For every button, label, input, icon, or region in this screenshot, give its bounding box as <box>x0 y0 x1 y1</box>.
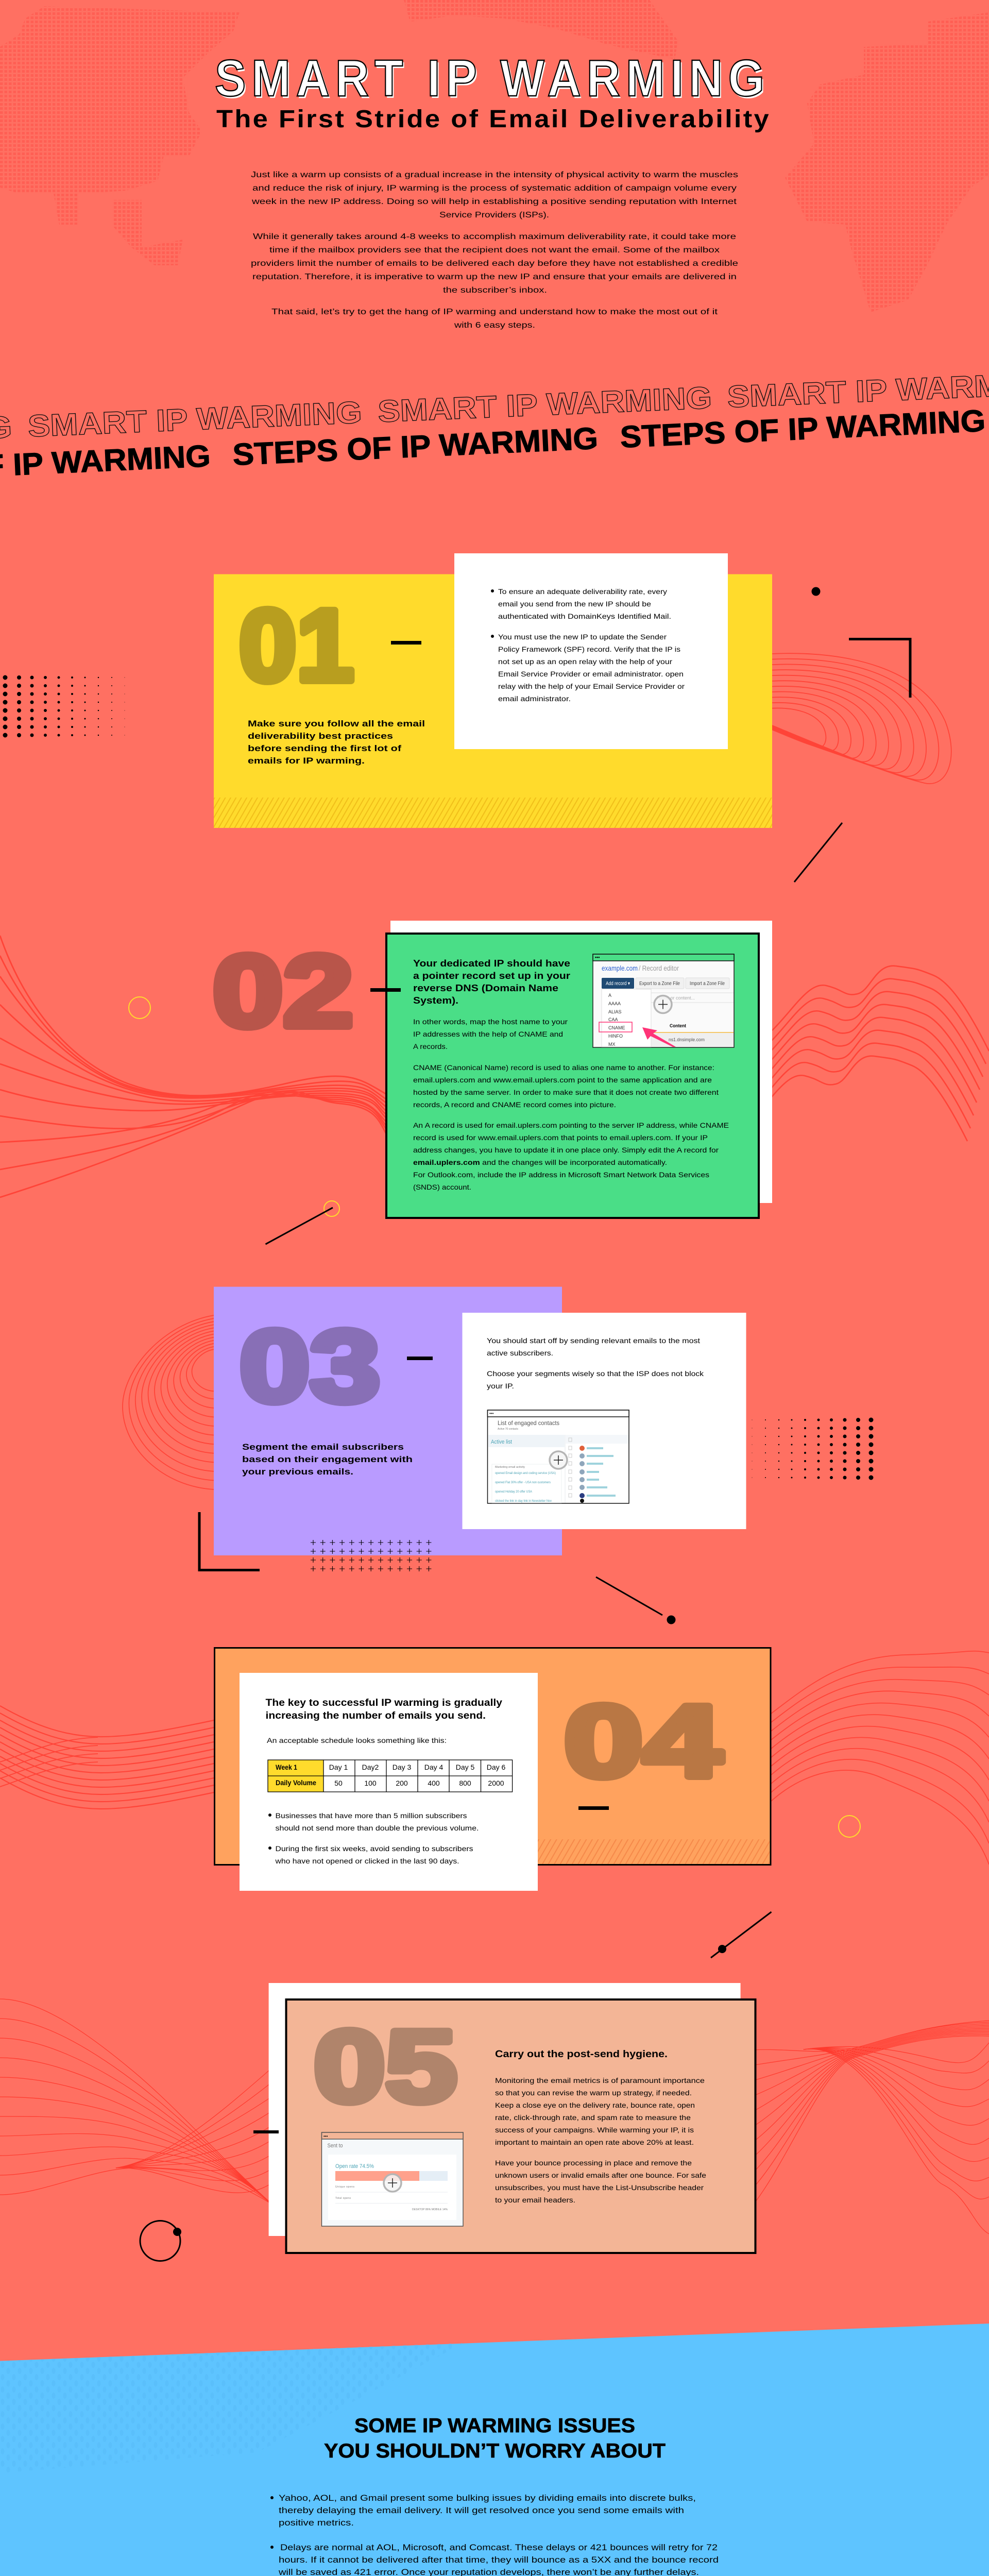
step 2 heading: reverse DNS (Domain Name <box>413 983 558 993</box>
step 4 schedule table: Day 6 <box>487 1763 505 1771</box>
step 2 screenshot: record editor: / Record editor <box>639 964 679 972</box>
step 5 paragraphs: important to maintain an open rate above 20% at least. <box>495 2138 694 2146</box>
step 4 number: 04 <box>564 1684 722 1798</box>
step 5 white backing <box>269 1983 741 2236</box>
step 5 paragraphs: to your email headers. <box>495 2196 575 2204</box>
step 2 screenshot: record editor: AAAA <box>608 1001 621 1006</box>
step 4 hatch strip <box>538 1839 770 1864</box>
step 5 heading: Carry out the post-send hygiene. <box>495 2049 668 2060</box>
red waves: step 4 left <box>0 1706 216 1809</box>
issues bullets: Yahoo, AOL, and Gmail present some bulking issues by dividing emails into discrete bulks, <box>279 2493 696 2503</box>
step 1 heading: Make sure you follow all the email <box>248 719 425 728</box>
intro text block: the subscriber’s inbox. <box>443 286 547 295</box>
red waves: step 5 right <box>752 2021 989 2234</box>
step 5 paragraphs: Have your bounce processing in place and remove the <box>495 2159 692 2167</box>
step 2 screenshot: record editor: Import a Zone File <box>690 981 725 987</box>
step 4 bullets: During the first six weeks, avoid sending to subscribers <box>275 1844 473 1853</box>
step 4 heading: The key to successful IP warming is gradually <box>266 1698 502 1708</box>
step 3 purple card <box>214 1287 562 1555</box>
step 5 number: 05 <box>314 2009 457 2123</box>
step 2 dash <box>370 988 401 992</box>
step 2 paragraphs <box>413 1018 729 1191</box>
step 3 heading: your previous emails. <box>242 1467 353 1477</box>
issues bullets: Delays are normal at AOL, Microsoft, and Comcast. These delays or 421 bounces will retry for 72 <box>280 2543 718 2552</box>
step 5 paragraphs: unsubscribes, you must have the List-Unsubscribe header <box>495 2183 704 2192</box>
step 2 screenshot: record editor: CNAME <box>608 1025 625 1030</box>
step 5 screenshot: open rate: Open rate 74.5% <box>335 2163 374 2170</box>
red waves: step 2 left <box>0 936 387 1197</box>
step 5 paragraphs: unknown users or invalid emails after one bounce. For safe <box>495 2171 706 2179</box>
step 2 paragraphs: records, A record and CNAME record comes into picture. <box>413 1100 616 1109</box>
step 5 paragraphs <box>495 2076 706 2204</box>
slanted band: SMART IP WARMING outline: SMART IP WARMING <box>377 380 712 429</box>
step 3 screenshot: engaged contacts: opened Email design and coding service (USA) <box>495 1472 556 1475</box>
panel: step 2 <box>213 921 772 1218</box>
step 4 schedule table: Day 3 <box>393 1763 411 1771</box>
step 2 paragraphs: An A record is used for email.uplers.com pointing to the server IP address, while CNAME <box>413 1121 729 1129</box>
step 1 dash <box>391 641 421 645</box>
step 3 text: You should start off by sending relevant emails to the most <box>487 1336 700 1345</box>
step 2 screenshot: record editor: HINFO <box>608 1033 623 1039</box>
slanted band: SMART IP WARMING outline <box>0 366 989 458</box>
panel: step 4 <box>214 1648 771 1891</box>
step 3 dash <box>407 1357 433 1360</box>
step 5 paragraphs: so that you can revise the warm up strategy, if needed. <box>495 2089 692 2097</box>
step 2 screenshot: record editor: CAA <box>608 1017 618 1022</box>
step 1 heading: emails for IP warming. <box>248 756 365 766</box>
blue dot texture <box>0 2343 989 2576</box>
step 4 schedule table: Day 5 <box>456 1763 474 1771</box>
step 1 hatch strip <box>214 798 772 828</box>
step 4 schedule table: Daily Volume <box>276 1778 316 1787</box>
step 4 schedule table <box>268 1760 513 1792</box>
step 2 screenshot: record editor: Content <box>670 1023 686 1028</box>
step 2 paragraphs: email.uplers.com and the changes will be incorporated automatically. <box>413 1158 667 1166</box>
step 3 screenshot: engaged contacts: opened Holiday 20 offer USA <box>495 1490 532 1494</box>
issues bullets <box>270 2493 719 2576</box>
red waves: step 5 left <box>0 1999 273 2205</box>
step 4 white panel <box>240 1673 538 1891</box>
step 4 dash <box>578 1806 609 1810</box>
step 2 screenshot: record editor: example.com <box>602 964 638 972</box>
step 4 schedule table: Week 1 <box>276 1763 297 1771</box>
step 5 screenshot: open rate: Unique opens <box>335 2185 354 2189</box>
step 3 white panel <box>463 1313 746 1529</box>
step 4 schedule table: Day2 <box>362 1763 379 1771</box>
step 2 screenshot: record editor: MX <box>608 1042 615 1047</box>
step 1 heading: before sending the first lot of <box>248 743 401 753</box>
step 1 heading <box>248 719 425 766</box>
blue background <box>0 2324 989 2576</box>
issues bullets: hours. If it cannot be delivered after that time, they will bounce as a 5XX and the bounce record <box>279 2555 719 2565</box>
step 1 bullet text: Email Service Provider or email administrator. open <box>498 670 684 678</box>
decor: corner bracket, line and dot below step 3 <box>199 1512 676 1624</box>
world map dotted background <box>0 0 989 312</box>
step 4 heading: increasing the number of emails you send. <box>266 1710 486 1721</box>
intro text block: week in the new IP address. Doing so will help in establishing a positive sending reputation with Internet <box>251 197 737 206</box>
panel: step 5 <box>253 1983 755 2253</box>
decor: yellow rings and line near step 2 <box>129 997 339 1244</box>
step 4 heading <box>266 1698 502 1721</box>
red waves: step 2 right <box>751 966 989 1141</box>
step 5 paragraphs: Keep a close eye on the delivery rate, bounce rate, open <box>495 2101 695 2109</box>
step 4 schedule intro: An acceptable schedule looks something like this: <box>267 1736 447 1744</box>
step 2 paragraphs: IP addresses with the help of CNAME and <box>413 1030 563 1038</box>
step 4 schedule table: 100 <box>364 1779 377 1787</box>
step 4 bullets: should not send more than double the previous volume. <box>275 1824 479 1832</box>
slanted band: STEPS OF IP WARMING: STEPS OF IP WARMING <box>232 421 599 472</box>
step 1 yellow card <box>214 574 772 828</box>
step 3 number: 03 <box>240 1309 380 1423</box>
step 2 paragraphs: hosted by the same server. In order to make sure that it does not create two different <box>413 1088 719 1096</box>
step 2 screenshot: record editor: ••• <box>595 955 600 960</box>
issues heading: YOU SHOULDN’T WORRY ABOUT <box>324 2440 666 2462</box>
step 2 heading: a pointer record set up in your <box>413 971 570 981</box>
step 2 white backing <box>390 921 772 1203</box>
main title: SMART IP WARMING <box>215 49 770 107</box>
step 2 screenshot: record editor: Add record ▾ <box>606 981 630 987</box>
step 2 paragraphs: address changes, you have to update it in one place only. Simply edit the A record for <box>413 1146 719 1154</box>
step 3 text: active subscribers. <box>487 1349 553 1357</box>
step 2 paragraphs: A records. <box>413 1042 448 1050</box>
step 4 bullets <box>268 1811 479 1865</box>
slanted band: SMART IP WARMING outline: SMART IP WARMING <box>27 395 363 444</box>
step 3 screenshot: engaged contacts <box>487 1410 629 1503</box>
step 1 bullet text: To ensure an adequate deliverability rate, every <box>498 587 667 596</box>
issues heading <box>324 2415 666 2462</box>
red concentric lines: step 3 left <box>123 1315 214 1489</box>
step 3 text: your IP. <box>487 1382 514 1390</box>
intro text block <box>251 171 738 330</box>
panel: step 3 <box>214 1287 746 1555</box>
step 2 paragraphs: In other words, map the host name to your <box>413 1018 568 1026</box>
intro text block: providers limit the number of emails to be delivered each day before they have not established a credible <box>251 259 738 268</box>
intro text block: While it generally takes around 4-8 weeks to accomplish maximum deliverability rate, it could take more <box>253 232 736 241</box>
slanted band: STEPS OF IP WARMING: STEPS OF IP WARMING <box>619 403 986 454</box>
step 2 paragraphs: record is used for www.email.uplers.com that points to email.uplers.com. If your IP <box>413 1133 708 1142</box>
step 1 bullet text: relay with the help of your Email Service Provider or <box>498 682 685 690</box>
red wave: step 1 right <box>772 653 951 784</box>
red waves: step 4 right <box>771 1651 989 1865</box>
step 5 screenshot: open rate <box>321 2132 463 2226</box>
step 3 screenshot: engaged contacts: Active 70 contacts <box>498 1428 518 1431</box>
step 4 schedule table: Day 1 <box>329 1763 348 1771</box>
step 2 paragraphs: (SNDS) account. <box>413 1183 471 1191</box>
step 5 screenshot: open rate: ••• <box>323 2134 328 2139</box>
decor: yellow ring and line near step 4 <box>711 1816 860 1958</box>
slanted band: STEPS OF IP WARMING <box>0 403 986 489</box>
intro text block: That said, let’s try to get the hang of IP warming and understand how to make the most out of it <box>271 308 718 316</box>
step 1 bullet text: email you send from the new IP should be <box>498 600 651 608</box>
intro text block: and reduce the risk of injury, IP warming is the process of systematic addition of campaign volume every <box>252 184 737 193</box>
step 2 paragraphs: CNAME (Canonical Name) record is used to alias one name to another. For instance: <box>413 1063 714 1072</box>
step 2 paragraphs: email.uplers.com and www.email.uplers.com point to the same application and are <box>413 1076 712 1084</box>
decor: halftone dots left of step 1 <box>5 677 125 736</box>
decor: black ring with dot <box>140 2221 181 2261</box>
step 5 dash <box>253 2130 279 2133</box>
step 3 screenshot: engaged contacts: Marketing email activity <box>495 1466 525 1469</box>
panel: issues section <box>0 2324 989 2576</box>
step 4 schedule table: 50 <box>334 1779 343 1787</box>
intro text block: with 6 easy steps. <box>454 321 535 330</box>
step 1 bullet text <box>491 587 685 703</box>
step 1 bullet text: authenticated with DomainKeys Identified Mail. <box>498 612 671 620</box>
decor: plus grid <box>309 1538 434 1573</box>
decor: halftone dots right of step 3 <box>752 1420 871 1478</box>
step 2 heading <box>413 958 570 1006</box>
step 2 heading: System). <box>413 995 458 1006</box>
step 5 peach card <box>286 1999 755 2253</box>
panel: step 1 <box>214 553 772 828</box>
main title: SMART IP WARMING <box>216 52 772 109</box>
issues bullets: thereby delaying the email delivery. It will get resolved once you send some emails with <box>279 2505 684 2515</box>
step 5 paragraphs: Monitoring the email metrics is of paramount importance <box>495 2076 705 2084</box>
step 2 paragraphs: For Outlook.com, include the IP address in Microsoft Smart Network Data Services <box>413 1171 709 1179</box>
decor: black dot, corner and line near step 1 <box>794 587 910 882</box>
step 2 screenshot: record editor: ns1.dnsimple.com <box>669 1037 705 1042</box>
step 3 screenshot: engaged contacts: Active list <box>491 1439 512 1445</box>
step 5 screenshot: open rate: Sent to <box>328 2143 343 2149</box>
step 4 bullets: Businesses that have more than 5 million subscribers <box>275 1811 467 1820</box>
step 5 paragraphs: success of your campaigns. While warming your IP, it is <box>495 2126 694 2134</box>
step 4 orange card <box>214 1648 771 1865</box>
step 3 text: Choose your segments wisely so that the ISP does not block <box>487 1369 704 1378</box>
step 4 schedule table: 400 <box>428 1779 440 1787</box>
step 2 screenshot: record editor: Export to a Zone File <box>639 981 680 987</box>
step 1 white panel <box>454 553 728 749</box>
step 2 number: 02 <box>213 934 353 1048</box>
subtitle: The First Stride of Email Deliverability <box>216 106 771 133</box>
step 2 heading: Your dedicated IP should have <box>413 958 570 969</box>
intro text block: reputation. Therefore, it is imperative to warm up the new IP and ensure that your emails are delivered in <box>252 273 737 281</box>
intro text block: Service Providers (ISPs). <box>439 211 549 219</box>
step 4 schedule table: Day 4 <box>424 1763 443 1771</box>
step 3 heading: Segment the email subscribers <box>242 1442 404 1452</box>
intro text block: time if the mailbox providers see that the recipient does not want the email. Some of the mailbox <box>269 246 720 255</box>
step 1 bullet text: email administrator. <box>498 694 571 703</box>
step 5 paragraphs: rate, click-through rate, and spam rate to measure the <box>495 2113 691 2122</box>
step 2 screenshot: record editor: Name or content... <box>657 995 695 1001</box>
step 2 screenshot: record editor <box>593 954 734 1047</box>
step 2 screenshot: record editor: ALIAS <box>608 1009 622 1014</box>
issues bullets: positive metrics. <box>279 2518 354 2528</box>
step 3 text <box>487 1336 704 1390</box>
step 1 bullet text: Policy Framework (SPF) record. Verify that the IP is <box>498 645 680 653</box>
issues heading: SOME IP WARMING ISSUES <box>354 2415 635 2437</box>
step 4 schedule table: 2000 <box>488 1779 504 1787</box>
step 4 schedule table: 800 <box>459 1779 471 1787</box>
step 2 screenshot: record editor: A <box>608 993 611 998</box>
step 3 heading <box>242 1442 413 1477</box>
intro text block: Just like a warm up consists of a gradual increase in the intensity of physical activity to warm the muscles <box>251 171 738 179</box>
step 3 screenshot: engaged contacts: clicked the link in day link in Newsletter Nov <box>495 1500 552 1503</box>
step 5 screenshot: open rate: DESKTOP 86% MOBILE 14% <box>412 2208 448 2211</box>
step 1 bullet text: not set up as an open relay with the help of your <box>498 657 672 666</box>
step 3 screenshot: engaged contacts: opened Flat 30% offer - USA non customers <box>495 1481 551 1484</box>
step 3 heading: based on their engagement with <box>242 1454 413 1464</box>
step 1 heading: deliverability best practices <box>248 731 393 741</box>
step 4 schedule table: 200 <box>396 1779 408 1787</box>
step 2 green card <box>386 934 759 1218</box>
step 3 screenshot: engaged contacts: ••• <box>489 1411 494 1416</box>
step 5 screenshot: open rate: Total opens <box>335 2197 351 2200</box>
step 1 number: 01 <box>239 588 354 702</box>
step 4 bullets: who have not opened or clicked in the last 90 days. <box>275 1857 459 1865</box>
step 1 bullet text: You must use the new IP to update the Sender <box>498 633 667 641</box>
step 3 screenshot: engaged contacts: List of engaged contacts <box>498 1419 559 1427</box>
